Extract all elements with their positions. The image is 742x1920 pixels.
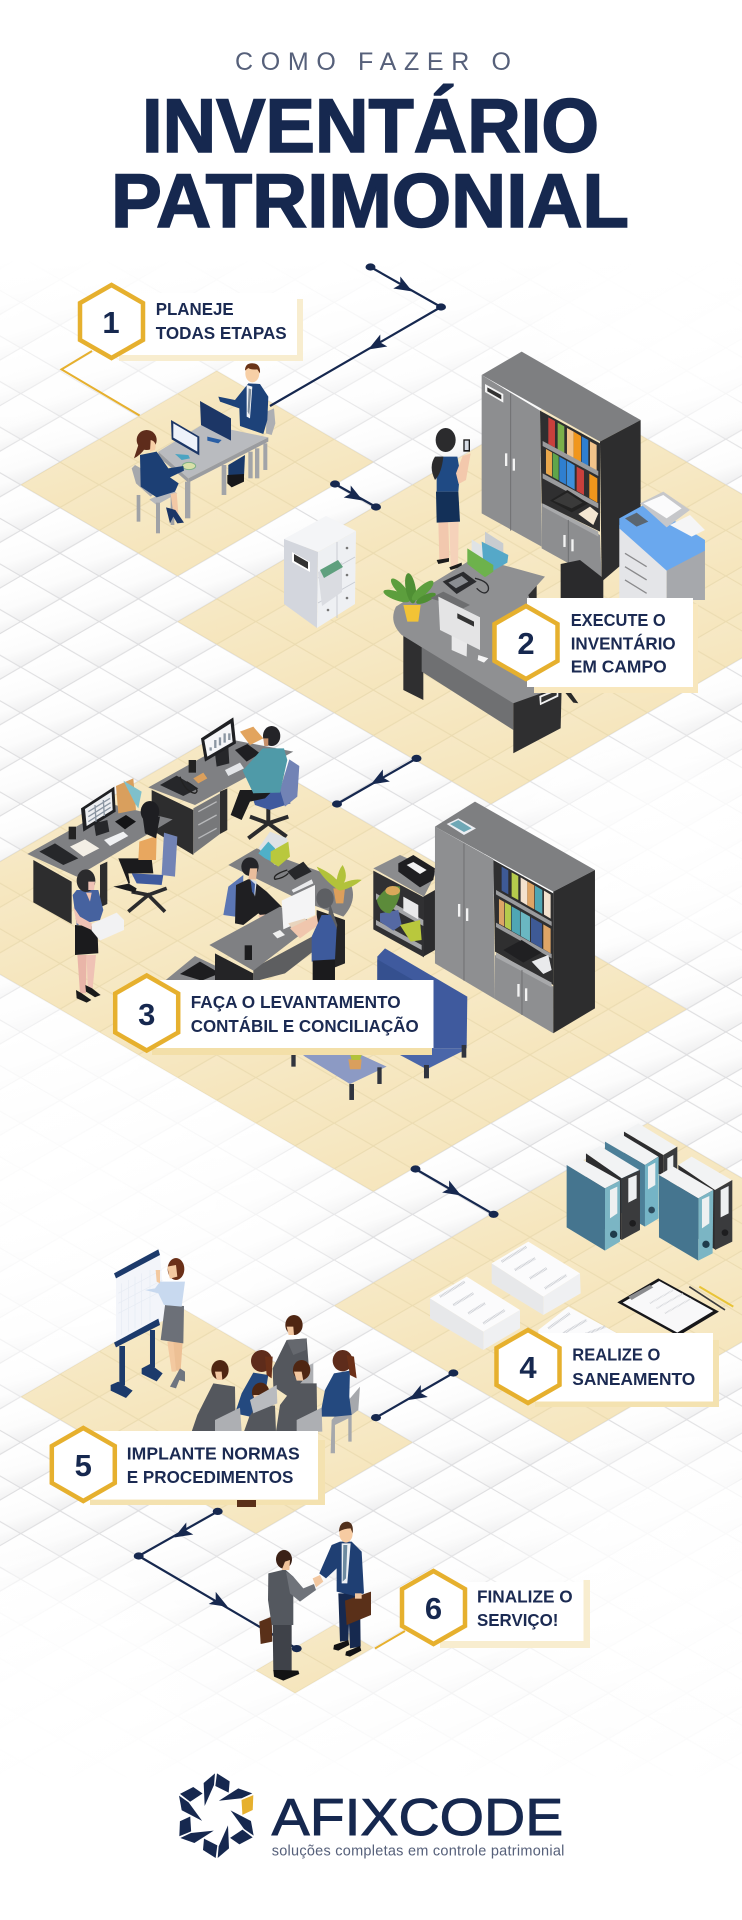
subtitle: COMO FAZER O <box>235 48 511 76</box>
label: FAÇA O LEVANTAMENTO <box>191 992 401 1012</box>
coffee table <box>291 1048 387 1100</box>
callout 1 <box>80 285 303 361</box>
woman <box>132 430 184 533</box>
title <box>111 48 629 244</box>
reception desk <box>393 557 578 753</box>
callout 4 <box>496 1330 719 1407</box>
audience: man left <box>192 1360 242 1432</box>
white monitor <box>282 885 315 933</box>
logo emblem <box>173 1773 260 1858</box>
connector line step 1 <box>62 351 140 416</box>
pens <box>689 1287 733 1310</box>
paper stack middle <box>492 1242 581 1315</box>
file organizers <box>467 532 508 577</box>
copier <box>619 492 705 600</box>
logo wordmark: AFIXCODE <box>272 1789 563 1847</box>
label: TODAS ETAPAS <box>156 323 287 343</box>
shadow <box>152 1000 432 1055</box>
filing cabinet <box>284 516 356 628</box>
shadow <box>440 1580 590 1648</box>
plant on desk <box>317 865 362 903</box>
hexagon badge <box>402 1571 465 1644</box>
scene 3: accounting office <box>27 717 595 1100</box>
arrow: step 2 to step 3 <box>332 755 422 808</box>
clipboard <box>617 1278 719 1336</box>
white box <box>528 1333 713 1402</box>
hexagon badge <box>494 606 558 679</box>
hexagon badge <box>52 1428 115 1501</box>
plant <box>382 572 437 622</box>
hexagon badge <box>496 1330 560 1403</box>
arrow: step 5 to step 6 <box>134 1508 302 1652</box>
standing woman with box <box>73 869 124 1003</box>
scene 6: handshake <box>259 1522 371 1681</box>
number: 2 <box>517 626 535 661</box>
shelf unit <box>373 855 437 957</box>
zone 6 <box>256 1625 373 1693</box>
number: 4 <box>519 1350 537 1385</box>
white box <box>111 293 297 355</box>
shadow <box>90 1440 325 1505</box>
left desk <box>27 805 173 924</box>
scene 1: two people at desk <box>132 363 275 533</box>
teal binder <box>605 1133 659 1227</box>
briefcase under step 5 <box>237 1500 256 1507</box>
shadow <box>119 299 303 361</box>
connector line step 6 <box>375 1631 405 1648</box>
callout 5 <box>52 1428 325 1505</box>
arrow: step 1 to step 2 lower <box>330 480 381 511</box>
label: IMPLANTE NORMAS <box>127 1444 300 1464</box>
audience: man right <box>276 1360 322 1432</box>
logo tagline: soluções completas em controle patrimonial <box>272 1844 564 1860</box>
floor zones <box>0 371 742 1693</box>
arrow: step 1 to step 2 upper <box>270 263 446 406</box>
audience: back row man <box>273 1315 313 1397</box>
label: INVENTÁRIO <box>571 632 676 653</box>
back of monitor <box>430 592 488 663</box>
black binder right <box>678 1157 732 1250</box>
back desk surface <box>228 832 353 970</box>
audience: woman center <box>235 1350 273 1417</box>
audience: woman right <box>320 1350 360 1453</box>
back black binder <box>624 1123 677 1187</box>
binders <box>496 867 552 974</box>
upper monitor <box>201 717 263 767</box>
white box <box>147 980 434 1048</box>
binders on shelves <box>543 417 598 525</box>
large cabinet <box>482 352 641 582</box>
black binder front <box>586 1146 640 1240</box>
number: 1 <box>102 305 120 340</box>
telephone <box>443 572 488 594</box>
label: EXECUTE O <box>571 610 666 630</box>
audience: man center <box>244 1383 277 1432</box>
flipchart <box>111 1249 165 1398</box>
woman in orange <box>113 801 177 912</box>
shadow <box>535 1340 719 1407</box>
scene 4: binders and paperwork <box>430 1123 733 1350</box>
desk <box>158 424 268 518</box>
woman at counter <box>290 888 337 982</box>
dark monitor <box>200 401 231 443</box>
front desk <box>209 907 315 982</box>
left monitor with calendar <box>81 778 142 836</box>
callout 6 <box>402 1571 590 1648</box>
blue binder left <box>567 1158 620 1251</box>
small table with book <box>165 956 237 982</box>
callout 2 <box>494 598 698 693</box>
man in black suit <box>223 857 282 928</box>
label: SANEAMENTO <box>572 1369 695 1389</box>
scene 2: field inventory <box>284 352 705 753</box>
man in teal <box>231 726 299 838</box>
keyboard <box>182 462 196 470</box>
label: CONTÁBIL E CONCILIAÇÃO <box>191 1015 419 1036</box>
scene 5: training <box>111 1249 360 1453</box>
label: FINALIZE O <box>477 1586 573 1606</box>
man in grey suit <box>259 1550 323 1681</box>
paper stack left <box>430 1277 520 1350</box>
man in navy suit <box>319 1522 371 1657</box>
label: E PROCEDIMENTOS <box>127 1467 293 1487</box>
presenter <box>145 1258 185 1388</box>
hexagon badge <box>115 976 178 1050</box>
label: PLANEJE <box>156 299 234 319</box>
white box <box>527 598 693 687</box>
zone 1 <box>21 371 373 576</box>
zone 2 <box>178 394 742 804</box>
logo <box>173 1773 564 1860</box>
label: SERVIÇO! <box>477 1610 558 1630</box>
number: 6 <box>425 1591 442 1626</box>
light monitor <box>171 420 199 460</box>
label: EM CAMPO <box>571 657 667 677</box>
arrow: step 3 to step 4 <box>410 1165 499 1218</box>
tall cabinet <box>435 802 595 1033</box>
flow arrows <box>134 263 499 1652</box>
zone 3 <box>0 736 687 1192</box>
title line 1: INVENTÁRIO <box>142 84 599 169</box>
woman with phone <box>432 428 471 570</box>
number: 5 <box>75 1448 92 1483</box>
zone 4 <box>334 1123 742 1442</box>
number: 3 <box>138 997 155 1032</box>
title line 2: PATRIMONIAL <box>111 159 629 244</box>
arrow: step 4 to step 5 <box>371 1369 458 1421</box>
callout 3 <box>115 976 433 1055</box>
man <box>218 363 275 487</box>
blue binder right <box>659 1167 713 1261</box>
shadow <box>534 604 698 693</box>
office chair <box>561 560 603 603</box>
paper stack right <box>538 1307 623 1337</box>
white box <box>84 1431 318 1500</box>
label: REALIZE O <box>572 1345 660 1365</box>
sofa <box>377 948 467 1078</box>
zone 5 <box>21 1306 413 1534</box>
white box <box>434 1582 584 1641</box>
hexagon badge <box>80 285 143 358</box>
upper desk <box>148 740 293 855</box>
